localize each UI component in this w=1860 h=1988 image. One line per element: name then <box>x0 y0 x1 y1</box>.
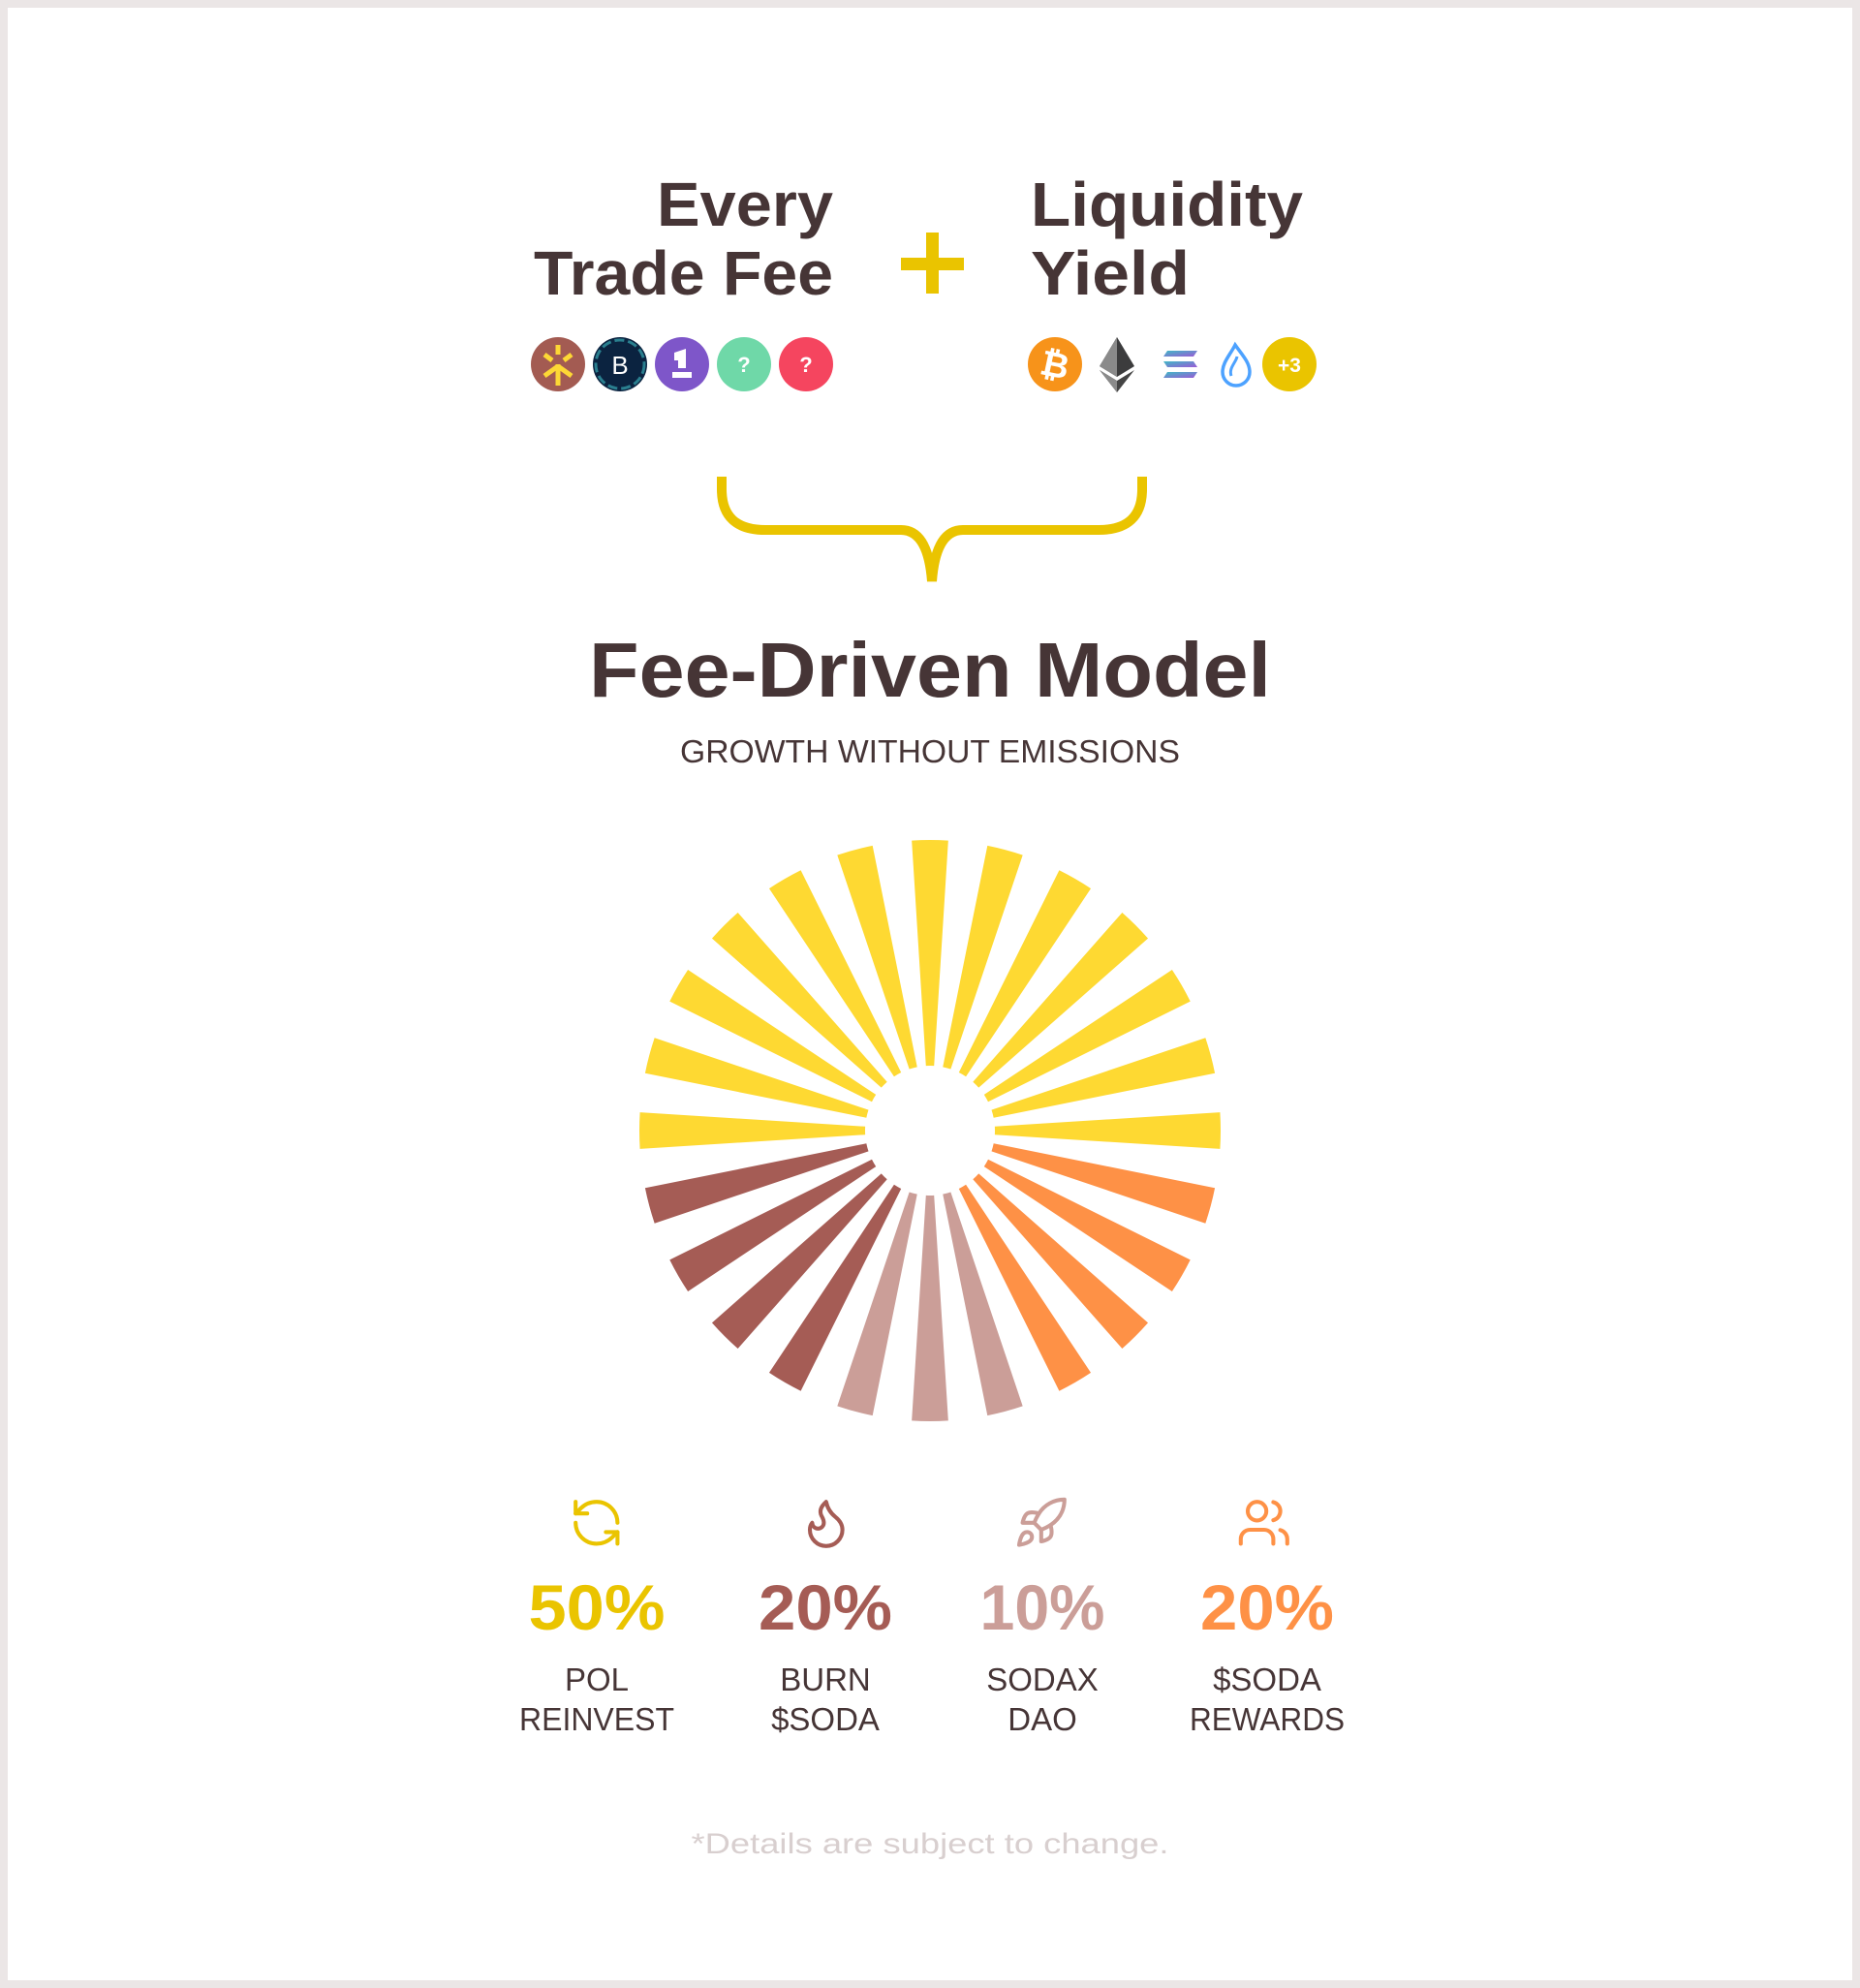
heading: liquidity yield: Liquidity <box>1031 170 1303 239</box>
stat: sodax dao: SODAX <box>986 1662 1099 1697</box>
liquidity asset icons <box>1028 337 1317 392</box>
stat: POL reinvest: REINVEST <box>519 1701 674 1737</box>
brace connector <box>722 477 1142 581</box>
stat: sodax dao: 10% <box>980 1571 1104 1643</box>
heading: every trade fee: Trade Fee <box>534 238 833 308</box>
stat: burn soda: $SODA <box>771 1701 880 1737</box>
icon: reinvest <box>575 1502 617 1543</box>
stat: POL reinvest <box>519 1502 674 1737</box>
icon: sui drop <box>1223 345 1250 386</box>
stat: soda rewards <box>1190 1502 1345 1737</box>
icon: ethereum <box>1100 337 1134 392</box>
icon: bitcoin: ₿ <box>1037 342 1073 388</box>
icon: unknown red <box>779 337 833 391</box>
stat: sodax dao: DAO <box>1008 1701 1077 1737</box>
icon: B protocol <box>593 337 647 391</box>
icon: bitcoin <box>1028 337 1082 391</box>
heading: liquidity yield: Yield <box>1031 238 1190 308</box>
subtitle: GROWTH WITHOUT EMISSIONS <box>680 733 1180 769</box>
title: Fee-Driven Model <box>589 627 1271 713</box>
icon: 1 protocol <box>655 337 709 391</box>
icon: +3 more: +3 <box>1278 355 1301 377</box>
heading: every trade fee <box>534 170 833 308</box>
icon: plus <box>901 233 964 294</box>
icon: users <box>1241 1502 1287 1543</box>
icon: unknown green <box>717 337 771 391</box>
stat: POL reinvest: 50% <box>529 1571 665 1643</box>
icon: asterisk protocol <box>531 337 585 391</box>
stat: burn soda: BURN <box>780 1662 871 1697</box>
icon: unknown red: ? <box>799 353 813 377</box>
icon: B protocol: B <box>611 351 629 380</box>
stat: soda rewards: REWARDS <box>1190 1701 1345 1737</box>
heading: liquidity yield <box>1031 170 1303 308</box>
sunburst chart <box>639 840 1221 1421</box>
icon: flame <box>810 1502 843 1546</box>
stat: sodax dao <box>980 1500 1104 1737</box>
icon: solana <box>1163 351 1197 378</box>
icon: unknown green: ? <box>737 353 751 377</box>
heading: every trade fee: Every <box>657 170 833 239</box>
stat: burn soda: 20% <box>759 1571 892 1643</box>
icon: +3 more <box>1262 337 1317 391</box>
stat: burn soda <box>759 1502 892 1737</box>
stat: soda rewards: 20% <box>1200 1571 1334 1643</box>
icon: rocket <box>1019 1500 1065 1545</box>
stat: soda rewards: $SODA <box>1213 1662 1321 1697</box>
stat: POL reinvest: POL <box>565 1662 629 1697</box>
footnote: *Details are subject to change. <box>692 1828 1168 1860</box>
trade fee protocol icons <box>531 337 833 391</box>
